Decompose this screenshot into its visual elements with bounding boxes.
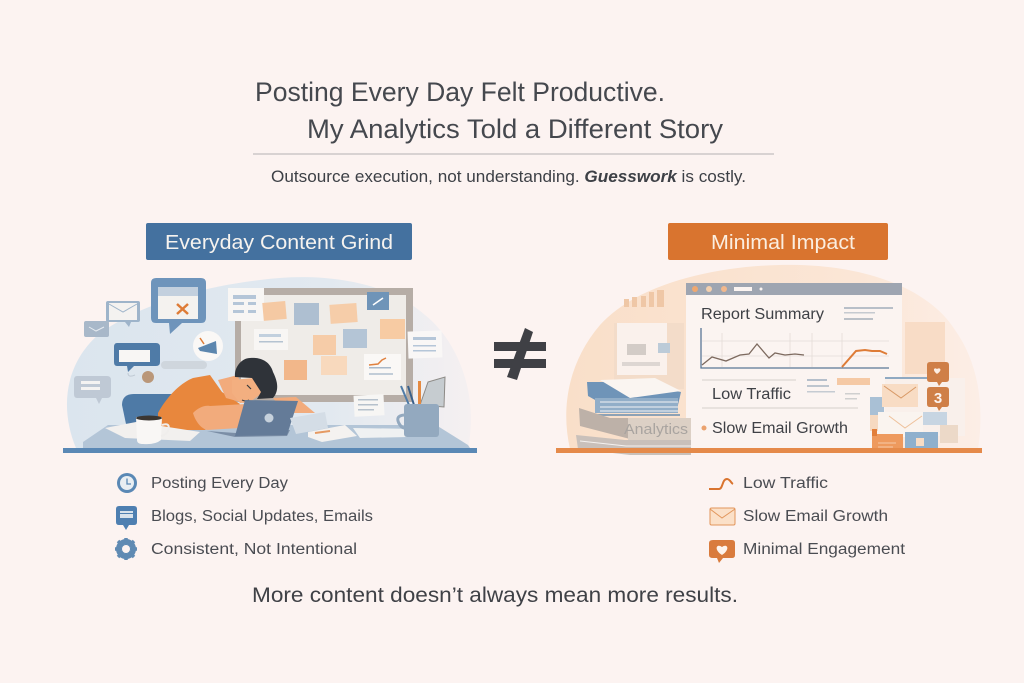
subtitle: Outsource execution, not understanding. Guesswork is costly. [271, 167, 746, 186]
icon: clock [117, 473, 137, 493]
chair [122, 394, 178, 424]
line chart [701, 328, 889, 368]
left heading banner [146, 223, 412, 260]
report window: Report Summary [701, 306, 824, 323]
right list [709, 475, 906, 563]
left list: Posting Every Day [151, 475, 288, 492]
stacked analytics books: Analytics [624, 422, 688, 438]
not equal sign [494, 328, 546, 380]
left list: Consistent, Not Intentional [151, 541, 357, 558]
coffee mug and papers [105, 394, 418, 444]
title [255, 77, 723, 144]
right list: Slow Email Growth [743, 508, 888, 525]
right list: Low Traffic [743, 475, 828, 492]
left illustration: exhausted person at desk [63, 277, 477, 453]
pencil cup [398, 377, 445, 437]
report window: Slow Email Growth [712, 420, 848, 437]
email and notification pile [870, 362, 965, 453]
icon: envelope [710, 508, 735, 525]
faded background charts [614, 290, 945, 389]
person [158, 358, 315, 430]
background blob [67, 277, 471, 448]
laptop [207, 400, 298, 437]
right list: Minimal Engagement [743, 541, 906, 558]
background blob [566, 265, 980, 449]
social bubbles [74, 278, 223, 404]
left list [115, 473, 373, 560]
icon: message [116, 506, 137, 530]
title: Posting Every Day Felt Productive. [255, 77, 665, 107]
right illustration: analytics report [556, 265, 982, 455]
desk [83, 425, 470, 448]
base line [63, 448, 477, 453]
icon: low traffic line [709, 479, 733, 489]
pinboard [228, 288, 442, 402]
title: My Analytics Told a Different Story [307, 114, 723, 144]
stacked analytics books [576, 378, 691, 455]
base line [556, 448, 982, 453]
closing line: More content doesn’t always mean more results. [252, 584, 738, 607]
right heading banner [668, 223, 888, 260]
report window: Low Traffic [712, 386, 791, 403]
icon: heart message [709, 540, 735, 563]
icon: gear [115, 538, 137, 560]
right heading banner: Minimal Impact [711, 232, 855, 254]
left list: Blogs, Social Updates, Emails [151, 508, 373, 525]
email and notification pile: 3 [934, 390, 942, 407]
report window [686, 283, 902, 449]
left heading banner: Everyday Content Grind [165, 232, 393, 254]
